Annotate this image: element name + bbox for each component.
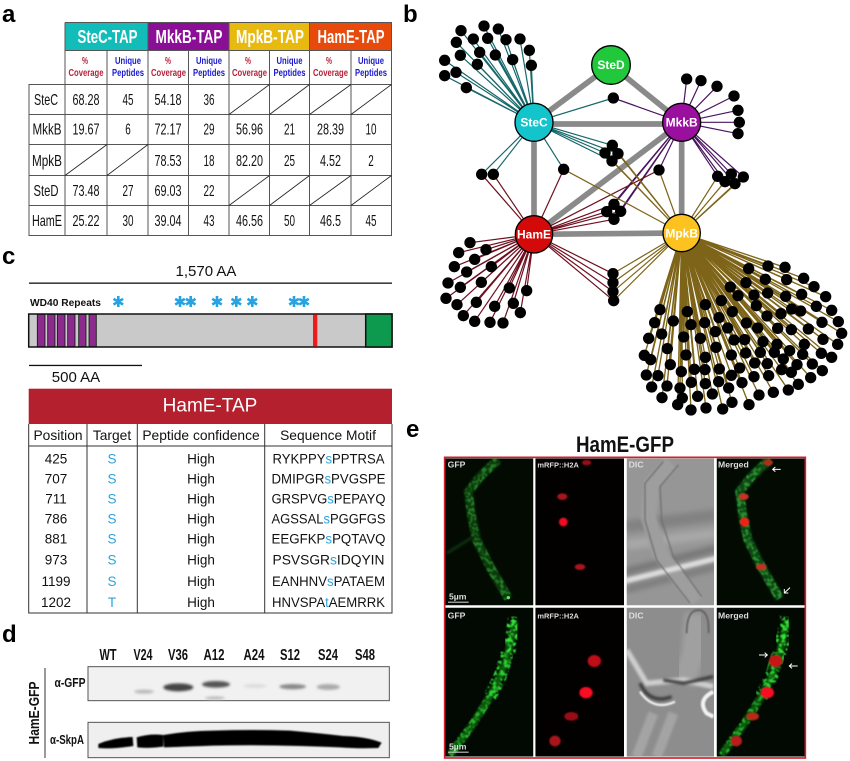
- row: MkkB: 72.17: [154, 122, 182, 138]
- column header: MpkB-TAP: MpkB-TAP: [236, 27, 304, 47]
- row: HamE: 46.56: [236, 213, 263, 230]
- row: MkkB: MkkB: [32, 122, 62, 138]
- scale label: 500 AA: [52, 369, 100, 386]
- panel label d: d: [2, 621, 17, 648]
- top row GFP: GFP: [448, 460, 466, 470]
- row 707: 707: [45, 471, 67, 486]
- subheaders: Peptides: [193, 67, 225, 79]
- subheaders: Coverage: [68, 67, 104, 79]
- top row mRFP: [535, 458, 624, 605]
- column header: MkkB-TAP: MkkB-TAP: [156, 27, 222, 47]
- row: SteC: 68.28: [72, 92, 100, 109]
- subheaders: Peptides: [355, 67, 387, 79]
- strain label: HamE-GFP: [26, 682, 43, 744]
- row 786: High: [187, 512, 215, 527]
- subheaders: Coverage: [313, 67, 348, 79]
- subheaders: Peptides: [112, 67, 144, 79]
- black HamE fan nodes: [446, 243, 527, 323]
- column header: HamE-TAP: [310, 22, 392, 50]
- subheaders: Unique: [276, 55, 303, 67]
- top row merged: [717, 458, 805, 605]
- row: SteC: 54.18: [154, 92, 182, 109]
- bottom row mRFP: [535, 608, 624, 757]
- row 711: 711: [45, 492, 67, 507]
- subheaders: %: [245, 55, 251, 67]
- row 1199: EANHNVsPATAEM: [272, 574, 385, 589]
- row 707: S: [107, 471, 117, 486]
- node: MkkB: [663, 103, 701, 141]
- column header: MkkB-TAP: [148, 22, 229, 50]
- panel label c: c: [2, 243, 15, 270]
- protein bar: [29, 314, 392, 347]
- row 1199: S: [107, 574, 117, 589]
- blot: GFP: [88, 667, 389, 701]
- subheaders: %: [326, 55, 332, 67]
- row 881: EEGFKPsPQTAVQ: [272, 532, 386, 547]
- row 881: [45, 532, 386, 547]
- row 425: 425: [45, 451, 67, 466]
- row: SteD: SteD: [34, 183, 58, 200]
- row: MkkB: 56.96: [236, 122, 263, 138]
- top row merged: Merged: [718, 460, 749, 470]
- row 425: RYKPPYsPPTRSA: [272, 451, 384, 466]
- row 1199: [41, 574, 385, 589]
- row: MpkB: 25: [284, 153, 295, 170]
- top row GFP: 5µm: [449, 591, 467, 601]
- row: MpkB: 18: [204, 153, 215, 170]
- WD40 label: WD40 Repeats: [30, 298, 102, 309]
- bottom row GFP: 5µm: [449, 741, 467, 751]
- row: HamE: 39.04: [154, 213, 182, 230]
- row 711: GRSPVGsPEPAYQ: [272, 492, 386, 507]
- column header: HamE-TAP: HamE-TAP: [318, 27, 384, 47]
- row: HamE: 43: [204, 213, 215, 230]
- row: MpkB: [32, 153, 374, 170]
- bottom row GFP: [445, 608, 533, 757]
- lane labels: [100, 647, 375, 664]
- column headings: [33, 428, 376, 443]
- subheaders: Unique: [358, 55, 384, 67]
- thick interaction edges: [534, 65, 682, 234]
- column headings: Peptide confidence: [142, 428, 260, 443]
- node: SteD: SteD: [597, 58, 625, 72]
- node: SteC: SteC: [520, 116, 548, 130]
- row 1202: [41, 595, 385, 610]
- row: HamE: 25.22: [72, 213, 100, 230]
- subheaders: %: [165, 55, 171, 67]
- top row DIC: [625, 458, 717, 605]
- column header: SteC-TAP: SteC-TAP: [78, 27, 138, 47]
- row 1202: High: [187, 595, 215, 610]
- row: SteD: 73.48: [72, 183, 100, 200]
- row: SteC: 45: [122, 92, 134, 109]
- antibody label: GFP: α-GFP: [54, 676, 86, 690]
- row: HamE: 50: [284, 213, 295, 230]
- row 711: [45, 492, 386, 507]
- MpkB shared lines: [564, 145, 743, 301]
- panel d: western blot: [26, 647, 389, 758]
- top row DIC: DIC: [629, 460, 644, 470]
- row: MpkB: 4.52: [320, 153, 341, 170]
- blot: SkpA: [88, 722, 389, 758]
- row: SteC: [34, 92, 215, 109]
- column headings: Sequence Motif: [280, 428, 376, 443]
- lane labels: V36: [168, 647, 188, 664]
- row: HamE: 45: [366, 213, 377, 230]
- row 707: [45, 471, 385, 486]
- bottom row mRFP: mRFP::H2A: [537, 611, 580, 620]
- HamE shared lines: [482, 169, 659, 301]
- lane labels: WT: [100, 647, 117, 664]
- panel label a: a: [2, 1, 16, 28]
- node: MpkB: [663, 214, 700, 252]
- row 973: S: [107, 553, 117, 568]
- subheaders: Unique: [196, 55, 222, 67]
- row 881: 881: [45, 532, 67, 547]
- top row GFP: [445, 458, 533, 605]
- bottom row DIC: DIC: [629, 610, 644, 620]
- row 1202: HNVSPAtAEMRRK: [272, 595, 385, 610]
- row: MkkB: 29: [204, 122, 215, 138]
- table grid: [29, 22, 392, 236]
- row 1202: 1202: [41, 595, 71, 610]
- row 711: High: [187, 492, 215, 507]
- node: HamE: HamE: [517, 228, 551, 242]
- row: HamE: [32, 213, 377, 230]
- row 1202: T: [108, 595, 116, 610]
- row: HamE: 46.5: [320, 213, 341, 230]
- column headings: Position: [33, 428, 83, 443]
- MkkB interactor lines: [607, 79, 743, 219]
- row 881: High: [187, 532, 215, 547]
- panel e: micrographs: [445, 457, 805, 758]
- row 425: [45, 451, 384, 466]
- row: SteC: 36: [204, 92, 215, 109]
- row 707: DMIPGRsPVGSPE: [272, 471, 385, 486]
- row 786: S: [107, 512, 117, 527]
- bottom row DIC: [627, 608, 714, 757]
- row: MpkB: 2: [368, 153, 374, 170]
- subheaders: Coverage: [232, 67, 267, 79]
- row 425: High: [187, 451, 215, 466]
- length label: 1,570 AA: [176, 263, 236, 280]
- lane labels: A12: [204, 647, 225, 664]
- empty cell diagonals: [65, 84, 392, 206]
- bottom row merged: [717, 608, 805, 757]
- row 425: S: [107, 451, 117, 466]
- subheaders: Coverage: [151, 67, 186, 79]
- row 1199: High: [187, 574, 215, 589]
- row 973: PSVSGRsIDQYIN: [272, 553, 384, 568]
- top row mRFP: mRFP::H2A: [537, 461, 580, 470]
- strain bracket line: [44, 668, 46, 758]
- length line: [29, 282, 392, 284]
- table banner: HamE-TAP: [163, 396, 257, 417]
- column header: SteC-TAP: [65, 22, 148, 50]
- row 973: 973: [45, 553, 67, 568]
- row 786: AGSSALsPGGFGS: [272, 512, 386, 527]
- row: SteD: [34, 183, 215, 200]
- subheaders: Unique: [115, 55, 141, 67]
- micrograph title: HamE-GFP: [576, 432, 674, 457]
- red motif: [313, 314, 317, 346]
- row: MkkB: 28.39: [317, 122, 344, 138]
- row 786: [45, 512, 386, 527]
- WD40 repeats: [37, 314, 96, 346]
- row: MpkB: MpkB: [32, 153, 62, 170]
- row 707: High: [187, 471, 215, 486]
- phosphosite stars: [114, 296, 309, 307]
- scale bar: [29, 365, 142, 366]
- panel a: TAP coverage table: [29, 22, 392, 236]
- MpkB fan lines: [644, 233, 842, 410]
- subheaders: [68, 55, 387, 79]
- column header: MpkB-TAP: [229, 22, 310, 50]
- panel c: protein domain diagram: [29, 263, 392, 386]
- node: MpkB: MpkB: [665, 226, 698, 240]
- row: MkkB: 6: [125, 122, 131, 138]
- micrograph frame: [445, 457, 805, 758]
- row: MkkB: [32, 122, 377, 138]
- node: HamE: [515, 216, 553, 253]
- subheaders: %: [82, 55, 88, 67]
- antibody label: SkpA: α-SkpA: [50, 733, 84, 747]
- panel b: interaction network: [445, 26, 842, 410]
- row: SteD: 22: [204, 183, 215, 200]
- row: SteC: SteC: [34, 92, 58, 109]
- lane labels: V24: [134, 647, 153, 664]
- row: MkkB: 21: [284, 122, 295, 138]
- panel label e: e: [406, 416, 419, 443]
- row 711: S: [107, 492, 117, 507]
- lane labels: S24: [318, 647, 338, 664]
- row: SteD: 69.03: [154, 183, 182, 200]
- panel label b: b: [403, 1, 418, 28]
- black MpkB fan nodes: [644, 266, 842, 410]
- lane labels: S12: [280, 647, 300, 664]
- table grid: [29, 424, 392, 613]
- row: MkkB: 19.67: [72, 122, 100, 138]
- row: MpkB: 82.20: [236, 153, 263, 170]
- row 973: High: [187, 553, 215, 568]
- node: SteD: [592, 46, 630, 84]
- row 881: S: [107, 532, 117, 547]
- node: MkkB: MkkB: [666, 115, 698, 129]
- table banner: [29, 389, 392, 424]
- row: SteD: 27: [122, 183, 134, 200]
- HamE fan lines: [446, 234, 534, 323]
- row 786: 786: [45, 512, 67, 527]
- subheaders: Peptides: [274, 67, 306, 79]
- node: SteC: [515, 103, 553, 141]
- row 1199: 1199: [41, 574, 71, 589]
- row: HamE: HamE: [32, 213, 62, 230]
- lane labels: S48: [355, 647, 375, 664]
- SteC interactor lines: [445, 26, 618, 174]
- panel c: phosphosite table: [29, 389, 392, 613]
- black interactor nodes: [445, 26, 743, 301]
- bottom row GFP: GFP: [448, 610, 466, 620]
- green domain: [366, 314, 392, 347]
- row: HamE: 30: [122, 213, 134, 230]
- column headings: Target: [93, 428, 131, 443]
- bottom row merged: Merged: [718, 610, 749, 620]
- row: MpkB: 78.53: [154, 153, 182, 170]
- lane labels: A24: [244, 647, 265, 664]
- row 973: [45, 553, 384, 568]
- row: MkkB: 10: [366, 122, 377, 138]
